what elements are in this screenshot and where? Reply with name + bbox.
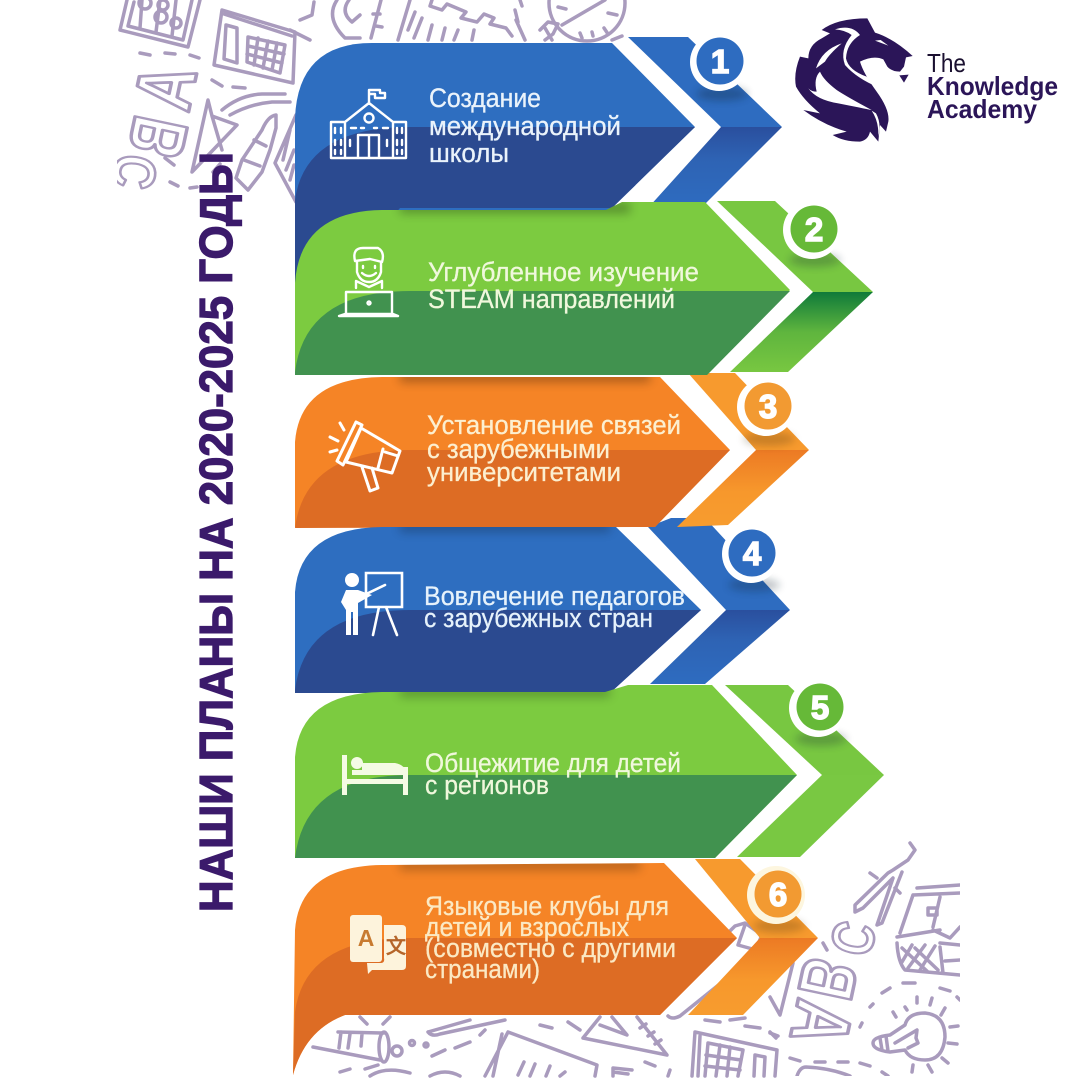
chevron back 2 [717,201,873,372]
banner 3: orange [295,372,730,528]
text: item 4: с зарубежных стран [424,603,653,633]
logo [795,18,1058,142]
text: item 6: детей и взрослых [425,912,629,942]
number badge 5 [789,679,847,746]
background doodles: top strip [290,0,625,41]
background doodles: top left: C [101,151,170,193]
number badge 2: 2 [805,211,823,248]
arrow backs: colored chevrons behind each banner [628,37,884,1015]
text: item 5: с регионов [425,770,549,800]
icon: school [331,90,406,158]
banner 2: green [295,202,790,375]
text: logo name: Knowledge [927,71,1058,101]
text: item 6: Языковые клубы для [425,891,669,921]
background doodles: bottom right: C [817,916,887,961]
text: item 2: STEAM направлений [428,284,675,314]
background doodles: top left: A [117,57,214,117]
chevron back 4 [648,518,790,684]
text: item 3: университетами [427,457,621,487]
text: item 6: (совместно с другими [425,933,676,963]
title: НАШИ ПЛАНЫ НА 2020-2025 ГОДЫ [190,152,242,912]
text: item 5 [425,748,681,800]
number badge 1: 1 [711,43,729,80]
text: item 6: странами) [425,954,540,984]
icon: translation cards: A [358,925,374,951]
banner 1: blue [295,43,695,330]
text: item 4: Вовлечение педагогов [424,581,685,611]
number badge 6 [747,866,805,933]
background doodles: bottom right [770,843,960,1076]
background doodles: bottom strip [313,923,777,1076]
background doodles: top left [101,0,296,202]
text: logo name [927,48,1058,124]
text: item 3 [427,410,681,487]
text: item 1: Создание [429,83,541,113]
number badge 1 [690,33,748,101]
number badge 3 [737,378,795,446]
chevron back 3 [677,373,809,527]
text: item 1: международной [429,111,621,141]
text: item 6 [425,891,676,984]
text: item 1 [429,83,621,168]
number badge 2 [783,201,841,267]
icon: lion head [795,18,913,142]
text: item 1: школы [429,138,509,168]
icon: translation cards [350,915,407,974]
text: item 2 [428,257,699,314]
text: item 2: Углубленное изучение [428,257,699,287]
text: item 3: с зарубежными [427,434,610,464]
text: logo name: Academy [927,94,1038,124]
chevron back 1 [628,37,782,208]
text: item 3: Установление связей [427,410,681,440]
text: item 5: Общежитие для детей [425,748,681,778]
banner 4: blue [295,522,701,693]
banner 5: green [295,685,797,858]
banner 6: orange [293,860,737,1075]
icon: translation cards: 文 [386,934,407,958]
chevron back 5 [725,685,884,857]
icon: bed [342,755,408,795]
icon: megaphone [330,422,400,491]
number badge 6: 6 [769,876,787,913]
number badge 5: 5 [811,689,829,726]
text: logo name: The [927,48,966,78]
number badge 4 [722,525,780,592]
background doodles: top left: B [113,110,205,165]
icon: student with laptop [339,248,398,316]
icon: teacher at board [341,573,402,635]
text: item 4 [424,581,685,633]
background doodles: bottom right: B [781,951,873,1006]
number badge 4: 4 [743,535,762,572]
chevron back 6 [688,859,818,1015]
background doodles: bottom right: A [773,993,870,1053]
number badge 3: 3 [759,388,777,425]
